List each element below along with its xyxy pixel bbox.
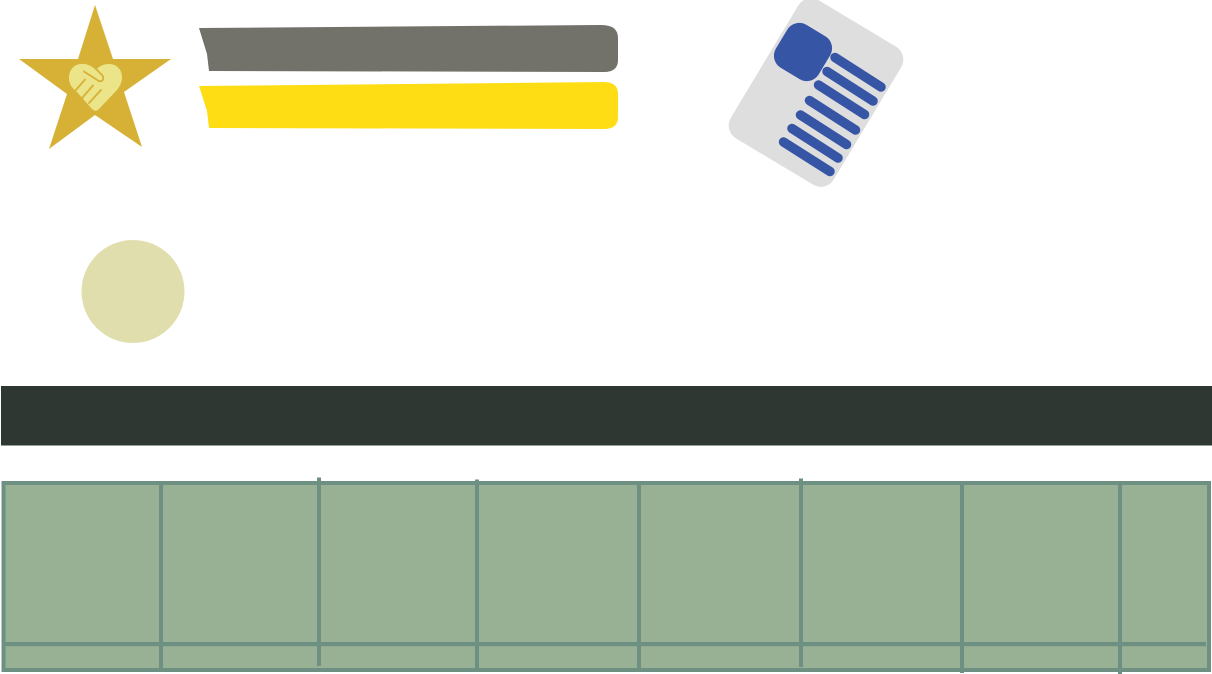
table background and outer border — [4, 483, 1209, 670]
table row divider — [4, 642, 1206, 646]
table: green grid — [4, 478, 1209, 674]
handshake heart — [69, 64, 122, 111]
document text lines — [784, 58, 881, 172]
icon: document — [723, 0, 909, 192]
star — [19, 5, 171, 149]
ribbon: yellow subtitle bar — [199, 82, 618, 129]
ribbon: grey title bar — [199, 25, 618, 72]
icon: gold star with handshake heart — [19, 5, 171, 149]
document sheet — [723, 0, 909, 192]
dark section banner — [1, 386, 1212, 446]
document picture block — [769, 18, 837, 86]
table column dividers — [159, 478, 1122, 674]
circle: pale khaki badge — [82, 240, 184, 343]
